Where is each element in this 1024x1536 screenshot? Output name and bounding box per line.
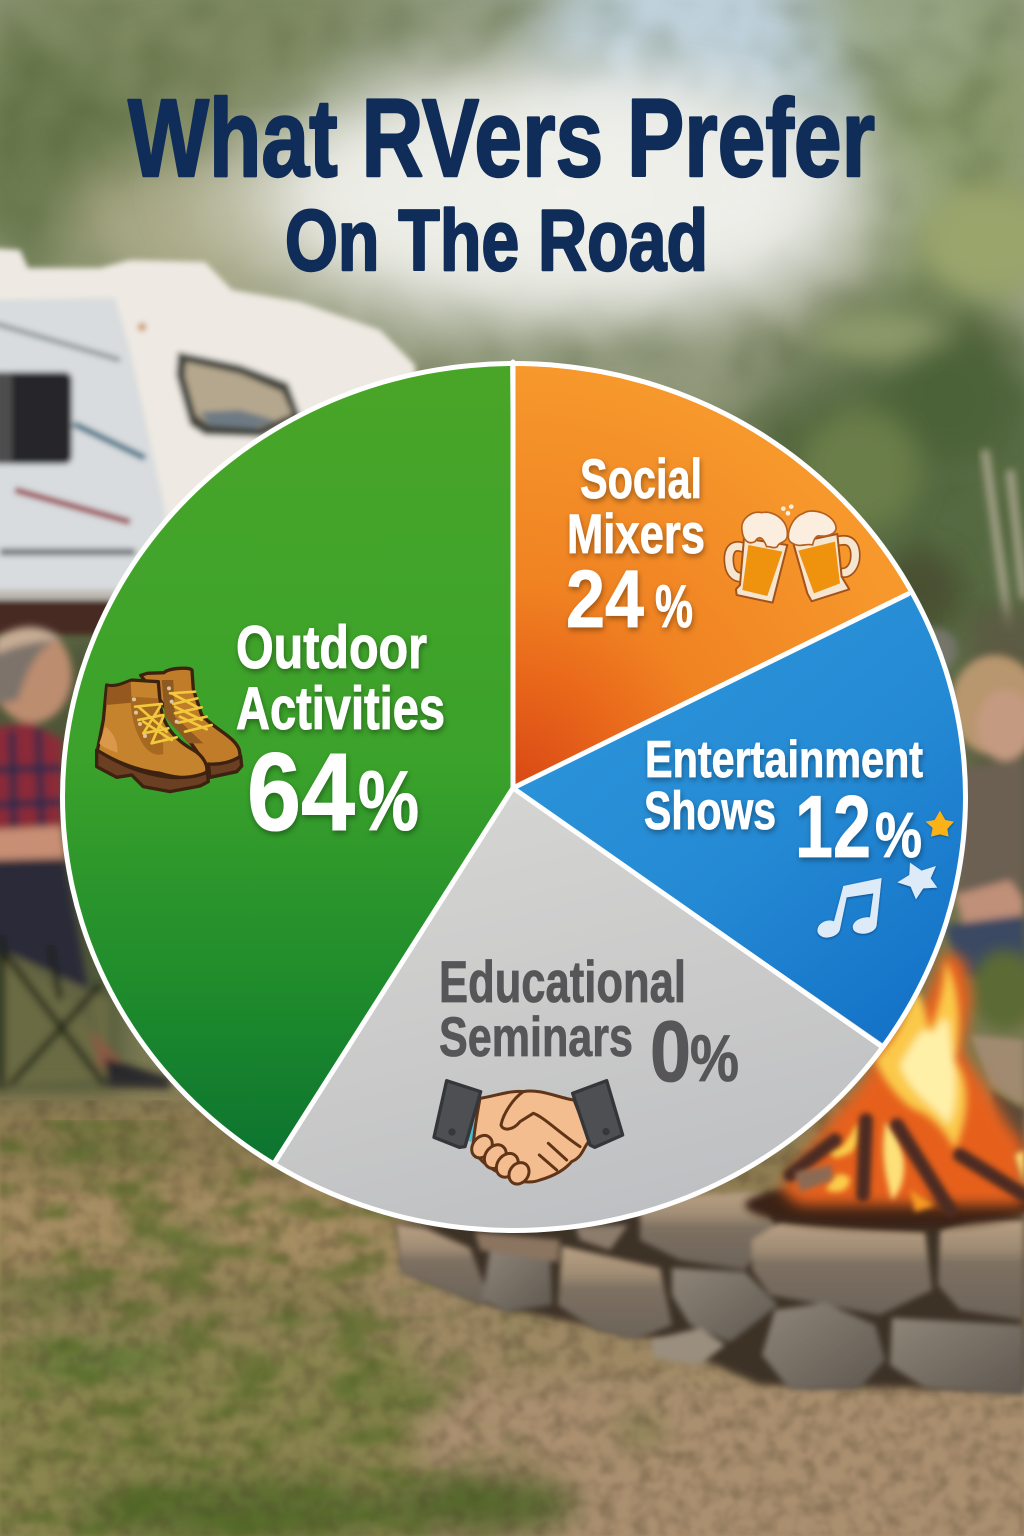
background: green beyond fire (971, 950, 1024, 1030)
background: seated woman on right (913, 628, 1024, 985)
cyan shirt cuff (467, 1120, 485, 1145)
label: educational seminars 0% (439, 950, 739, 1100)
background: bright haze behind title (160, 30, 960, 360)
label: outdoor activities 64%: % (358, 754, 419, 848)
title: what rvers prefer on the road (128, 77, 875, 289)
background: grass tufts (0, 1120, 560, 1536)
background: pale birch trunks (985, 450, 1024, 650)
label: educational seminars 0%: Educational (439, 950, 686, 1015)
slice: entertainment shows (518, 594, 963, 1044)
front boot (97, 680, 208, 792)
pie outer white rim (60, 361, 968, 1233)
label: outdoor activities 64%: Outdoor (236, 614, 427, 681)
background: camper RV (0, 248, 418, 635)
background: leafy right trees (800, 185, 1024, 630)
right cuff (573, 1081, 623, 1147)
background: left and right mid shadow (0, 610, 1024, 1100)
icon: beer mugs (729, 504, 855, 603)
gold star (926, 811, 954, 837)
label: social mixers 24%: 24 (566, 554, 644, 645)
background: ground and grass (0, 1100, 1024, 1536)
label: outdoor activities 64% (236, 614, 445, 854)
right mug (788, 511, 855, 601)
icon: music note and stars (817, 811, 954, 938)
label: educational seminars 0%: 0 (650, 1004, 691, 1100)
background: warm glow left of title (60, 150, 420, 290)
music note (817, 878, 882, 938)
foam bubbles (781, 504, 794, 516)
hands (473, 1091, 590, 1182)
left mug (729, 512, 787, 603)
slice: outdoor activities (65, 366, 510, 1161)
icon: handshake (434, 1081, 623, 1188)
background: seated man on left (0, 626, 170, 1090)
label: social mixers 24%: % (655, 573, 693, 640)
icon: hiking boots (97, 668, 242, 792)
label: social mixers 24% (566, 447, 705, 645)
title line 2: On The Road (285, 193, 708, 289)
left cuff (434, 1081, 481, 1147)
label: social mixers 24%: Mixers (567, 502, 705, 565)
slice divider lines (275, 362, 908, 1162)
background: distant trees and sky (0, 0, 1024, 670)
label: educational seminars 0%: % (690, 1021, 739, 1095)
background: foliage mottling (0, 0, 1024, 640)
background: stone fire ring (395, 1035, 1024, 1395)
label: entertainment shows 12%: 12 (795, 777, 871, 876)
label: social mixers 24%: Social (580, 447, 702, 510)
back boot (141, 668, 242, 777)
label: outdoor activities 64%: 64 (247, 731, 355, 854)
background: campfire (745, 950, 1024, 1229)
background: logs (790, 1120, 1024, 1210)
slice: social mixers (516, 366, 909, 784)
slice: educational seminars (277, 792, 882, 1228)
label: entertainment shows 12%: % (875, 799, 922, 871)
label: educational seminars 0%: Seminars (439, 1005, 633, 1068)
background: ground speckle (0, 1100, 1024, 1536)
pale star (897, 863, 937, 899)
label: outdoor activities 64%: Activities (236, 675, 445, 742)
fingers (467, 1131, 533, 1188)
label: entertainment shows 12% (644, 731, 923, 876)
pie chart (60, 360, 968, 1233)
label: entertainment shows 12%: Shows (644, 781, 776, 841)
label: entertainment shows 12%: Entertainment (645, 731, 923, 789)
